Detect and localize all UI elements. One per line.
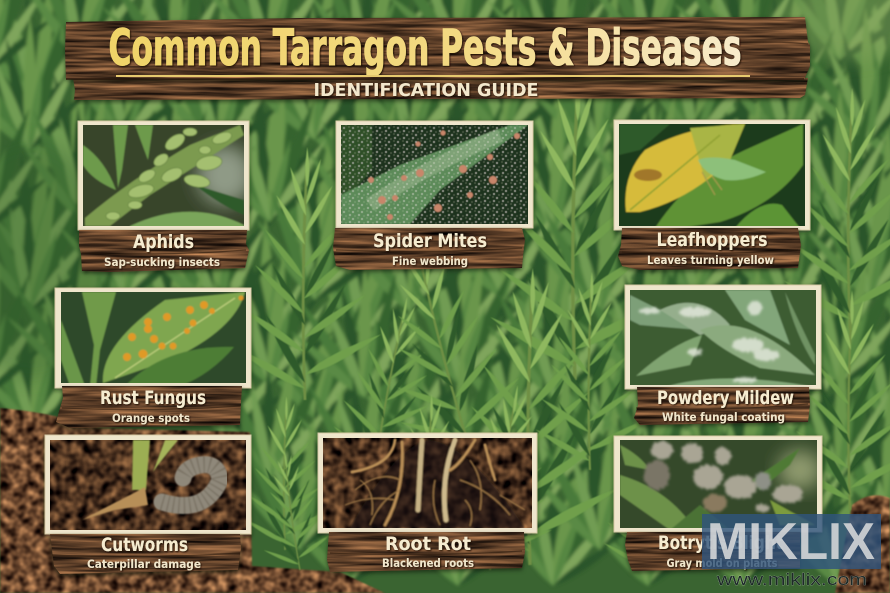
card: Aphids	[78, 121, 253, 272]
photo frame	[55, 288, 251, 388]
watermark logo: MIKLIX	[707, 513, 875, 571]
name plaque	[56, 386, 242, 428]
rust photo	[57, 290, 249, 386]
name plaque	[79, 230, 249, 272]
name: Root Rot	[385, 533, 471, 555]
symptom: Fine webbing	[392, 254, 468, 268]
watermark	[702, 513, 881, 589]
card: Cutworms	[45, 435, 251, 574]
name plaque	[327, 532, 525, 572]
photo frame	[78, 121, 249, 230]
symptom: Orange spots	[112, 411, 190, 425]
name plaque	[50, 534, 241, 574]
name plaque	[634, 387, 810, 425]
botrytis photo	[616, 438, 822, 530]
subtitle: IDENTIFICATION GUIDE	[314, 80, 538, 101]
card: Root Rot	[318, 433, 537, 572]
title divider	[116, 75, 750, 77]
photo frame	[336, 121, 533, 228]
name: Leafhoppers	[656, 229, 768, 251]
card: Spider Mites	[333, 121, 533, 270]
cutworm photo	[50, 440, 246, 530]
spider mite photo	[338, 122, 530, 226]
mildew photo	[627, 287, 819, 387]
name: Powdery Mildew	[657, 387, 794, 409]
photo frame	[318, 433, 537, 533]
symptom: Blackened roots	[382, 556, 474, 570]
name plaque	[333, 228, 525, 270]
symptom: Leaves turning yellow	[647, 253, 774, 267]
card: Botrytis Blight	[614, 436, 822, 571]
tarragon sprigs	[233, 72, 890, 578]
symptom: Caterpillar damage	[87, 557, 201, 571]
name: Botrytis Blight	[658, 532, 783, 554]
card: Leafhoppers	[614, 120, 810, 270]
card: Powdery Mildew	[625, 285, 821, 425]
name: Spider Mites	[373, 230, 487, 252]
title banner	[65, 17, 810, 101]
symptom: Sap-sucking insects	[104, 255, 220, 269]
watermark url: www.miklix.com	[716, 570, 867, 589]
card: Rust Fungus	[55, 288, 251, 428]
root rot photo	[323, 438, 532, 528]
aphid photo	[83, 125, 244, 226]
name: Rust Fungus	[100, 387, 206, 409]
photo frame	[625, 285, 821, 389]
symptom: Gray mold on plants	[666, 556, 778, 570]
symptom: White fungal coating	[662, 410, 785, 424]
name plaque	[625, 532, 800, 571]
name: Cutworms	[101, 534, 188, 556]
banner planks	[65, 17, 810, 100]
name plaque	[618, 228, 801, 270]
name: Aphids	[133, 231, 194, 253]
watermark panel	[702, 514, 881, 569]
leafhopper photo	[616, 122, 808, 228]
photo frame	[45, 435, 251, 534]
photo frame	[614, 120, 810, 230]
photo frame	[614, 436, 822, 532]
